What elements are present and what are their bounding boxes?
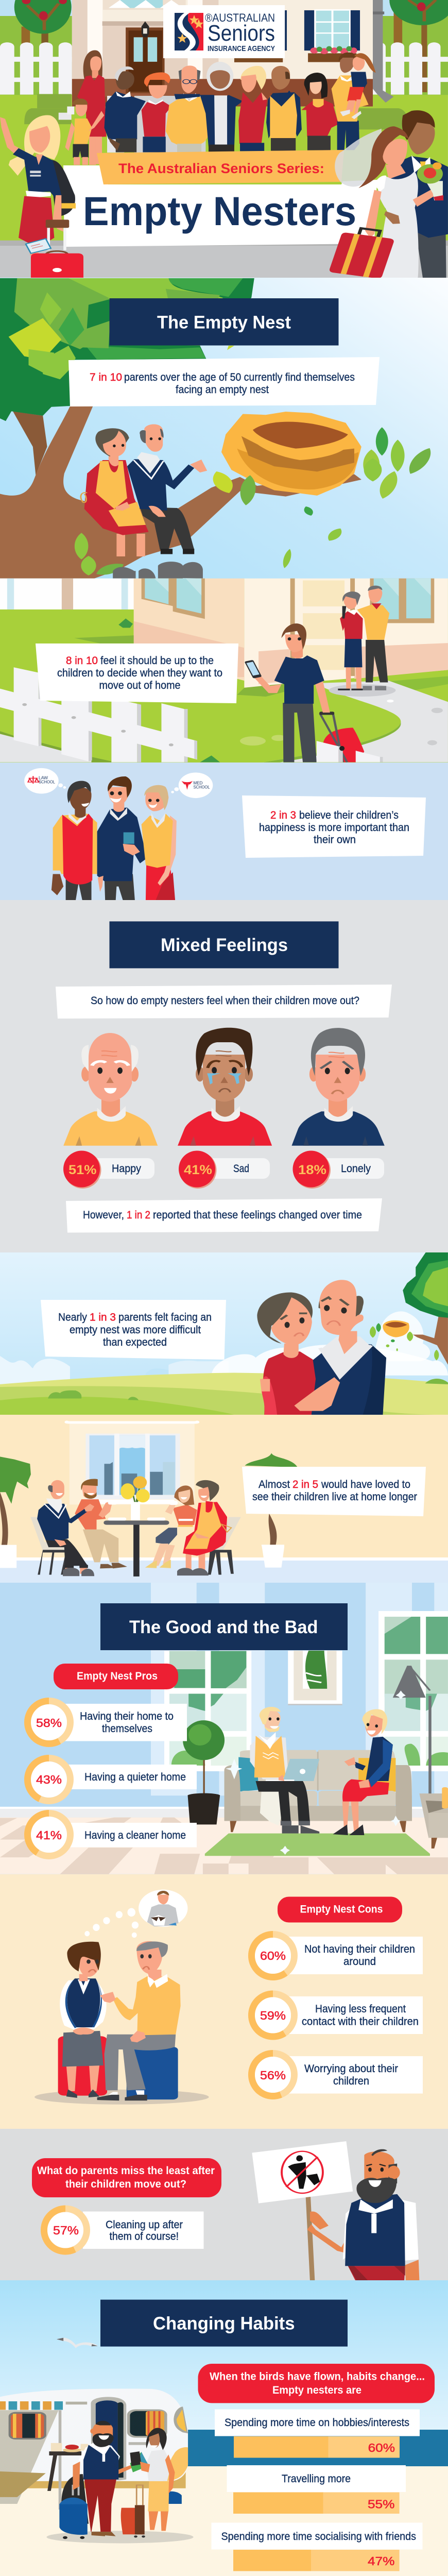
logo wordmark: Seniors xyxy=(208,21,275,46)
man holding sign xyxy=(252,2141,419,2281)
sea xyxy=(0,2430,448,2466)
woman with grey curly hair xyxy=(174,62,243,152)
con: 59%: Having less frequent xyxy=(315,2003,406,2015)
habit bar: friends 47% xyxy=(211,2522,422,2571)
question pill: What do parents miss the least after xyxy=(37,2165,215,2177)
law school label: LAW xyxy=(39,775,48,780)
distant tree with nest xyxy=(370,1252,448,1365)
man xyxy=(127,424,207,579)
bald man with glasses xyxy=(166,65,212,152)
father in red vest xyxy=(51,781,97,900)
section heading xyxy=(109,921,339,968)
con: 56%: children xyxy=(333,2075,369,2087)
med school label: MED xyxy=(194,780,203,785)
caravan xyxy=(0,2388,188,2524)
landscape with clouds and hills xyxy=(0,1311,448,1415)
section: miss the least xyxy=(0,2129,448,2281)
thought bubble: law school xyxy=(24,768,66,793)
con: 56% xyxy=(251,2054,423,2096)
lounge scene xyxy=(183,1666,448,1856)
panel: 1 in 2 statistic: reported that these feelings changed over time xyxy=(153,1209,362,1221)
panel: 1 in 3 statistic: 1 in 3 xyxy=(90,1312,116,1324)
woman in navy xyxy=(333,1709,393,1835)
blonde woman xyxy=(238,66,267,151)
panel: 2 in 5 statistic: 2 in 5 xyxy=(292,1479,318,1490)
section: difficult to adjust xyxy=(0,1252,448,1415)
pro: 41% cleaner home: 41% xyxy=(36,1828,62,1842)
pro: 41% cleaner home xyxy=(28,1814,197,1856)
panel: 2 in 3 statistic: their own xyxy=(314,834,356,846)
panel: 2 in 3 statistic: happiness is more important than xyxy=(259,822,409,834)
traveller with suitcase xyxy=(0,115,83,278)
section: children's happiness xyxy=(0,762,448,900)
garden and house xyxy=(0,579,448,762)
three parents xyxy=(51,776,177,900)
stat: 57% cleaning up: them of course! xyxy=(109,2231,179,2242)
mother in yellow xyxy=(142,785,177,900)
woman xyxy=(81,428,156,579)
cons pill xyxy=(278,1897,402,1923)
stat: 41% sad: Sad xyxy=(233,1163,249,1175)
habit bar: hobbies 60% xyxy=(215,2409,420,2458)
woman xyxy=(60,1942,107,2098)
habit bar: travelling 55%: 55% xyxy=(368,2498,394,2511)
habit bar: friends 47%: Spending more time socialising with friends xyxy=(221,2531,416,2543)
daughter xyxy=(145,1485,197,1568)
series ribbon: The Australian Seniors Series: xyxy=(118,161,324,176)
stat: 57% cleaning up xyxy=(44,2209,204,2251)
seagull xyxy=(57,2338,98,2348)
woman in red dress xyxy=(77,50,106,165)
logo mark xyxy=(175,13,204,50)
panel: 1 in 2 statistic xyxy=(66,1198,382,1232)
cons pill: Empty Nest Cons xyxy=(300,1903,383,1916)
con: 59% xyxy=(251,1994,423,2037)
pros pill: Empty Nest Pros xyxy=(77,1670,158,1682)
panel: 1 in 3 statistic: Nearly xyxy=(58,1312,87,1324)
panel: 7 in 10 statistic: 7 in 10 xyxy=(90,371,122,383)
section: moving out xyxy=(0,579,448,762)
section heading: Changing Habits xyxy=(153,2313,295,2334)
stat: 51% happy: 51% xyxy=(68,1163,97,1177)
pro: 58% home to themselves: Having their home to xyxy=(80,1710,174,1722)
pros pill xyxy=(54,1664,178,1689)
stat: 18% lonely: Lonely xyxy=(341,1163,371,1175)
series ribbon xyxy=(97,150,344,184)
pro: 43% quieter home xyxy=(28,1758,197,1801)
panel: 8 in 10 statistic: move out of home xyxy=(99,680,180,691)
panel: 2 in 5 statistic: Almost xyxy=(259,1479,290,1490)
intro pill: When the birds have flown, habits change... xyxy=(210,2371,425,2383)
sitting couple xyxy=(81,424,207,579)
bearded man xyxy=(307,2149,419,2281)
pro: 58% home to themselves: themselves xyxy=(102,1723,152,1735)
habit bar: travelling 55%: Travelling more xyxy=(282,2473,351,2485)
panel: 2 in 3 statistic: 2 in 3 xyxy=(270,809,296,821)
stat: 51% happy: Happy xyxy=(112,1163,141,1175)
luggage xyxy=(59,2485,182,2539)
bride and groom xyxy=(329,110,448,279)
section: cons xyxy=(0,1874,448,2129)
section heading: The Empty Nest xyxy=(157,312,291,333)
logo wordmark: ®AUSTRALIAN xyxy=(205,11,275,24)
habit bar: hobbies 60%: Spending more time on hobbies/interests xyxy=(225,2417,409,2429)
habit bar: travelling 55% xyxy=(227,2465,406,2514)
empty nest pros xyxy=(28,1664,197,1856)
right plant xyxy=(245,1453,298,1568)
nest xyxy=(75,412,437,578)
panel: 1 in 2 statistic: 1 in 2 xyxy=(127,1209,150,1221)
man with laptop xyxy=(250,1707,319,1834)
con: 56%: Worrying about their xyxy=(304,2063,398,2075)
parents at the door xyxy=(329,586,395,697)
panel: 8 in 10 statistic: children to decide when they want to xyxy=(57,667,222,679)
white fence xyxy=(0,667,197,762)
man xyxy=(97,1941,181,2100)
father in navy jumper xyxy=(97,776,147,900)
med school label: SCHOOL xyxy=(194,784,210,789)
worried couple xyxy=(257,1280,386,1415)
logo wordmark: INSURANCE AGENCY xyxy=(208,44,275,53)
pro: 58% home to themselves: 58% xyxy=(36,1716,62,1730)
pro: 43% quieter home: 43% xyxy=(36,1773,62,1786)
panel: 7 in 10 statistic: parents over the age of 50 currently find themselves xyxy=(124,371,355,383)
woman with black hair xyxy=(301,73,343,150)
con: 56%: 56% xyxy=(260,2069,286,2082)
thought bubble with son and dog xyxy=(84,1890,188,1938)
sparkles xyxy=(226,1690,406,1855)
family group xyxy=(65,50,376,165)
logo box xyxy=(163,5,285,58)
stat: 57% cleaning up: 57% xyxy=(53,2224,79,2237)
med school label xyxy=(194,780,210,789)
happy man xyxy=(63,1033,158,1146)
section heading: Mixed Feelings xyxy=(161,935,288,955)
woman xyxy=(257,1293,316,1415)
sign post xyxy=(306,2197,315,2281)
section: at the table xyxy=(0,1415,448,1583)
woman xyxy=(130,2428,175,2531)
panel: 1 in 3 statistic xyxy=(41,1300,226,1360)
panel: 2 in 3 statistic: believe their children’s xyxy=(299,809,399,821)
section: the empty nest xyxy=(0,278,448,579)
question panel xyxy=(56,985,392,1019)
mother xyxy=(177,1480,231,1575)
boy with cap xyxy=(65,98,105,165)
law school label: SCHOOL xyxy=(39,779,55,784)
crying man xyxy=(178,1028,272,1146)
left plant xyxy=(0,1456,31,1568)
window with curtains xyxy=(64,1421,199,1504)
section heading xyxy=(100,2300,348,2347)
section: hero xyxy=(0,0,448,279)
panel: 8 in 10 statistic xyxy=(36,643,238,703)
man xyxy=(312,1280,386,1415)
white title panel xyxy=(63,165,377,247)
section: mixed feelings xyxy=(0,900,448,1252)
section: changing habits xyxy=(0,2280,448,2576)
panel: 8 in 10 statistic: 8 in 10 xyxy=(66,655,98,667)
pro: 41% cleaner home: Having a cleaner home xyxy=(84,1829,186,1841)
man in navy jumper xyxy=(105,66,146,152)
living room background xyxy=(0,1583,448,1874)
armchair xyxy=(419,1787,448,1849)
red ottoman and blue ottoman xyxy=(58,2036,178,2099)
travelling couple xyxy=(46,2421,194,2543)
habit bar: hobbies 60%: 60% xyxy=(368,2441,395,2454)
rug xyxy=(205,1834,430,1856)
con: 60%: around xyxy=(343,1956,376,1968)
panel: 2 in 5 statistic: would have loved to xyxy=(321,1479,410,1490)
panel: 2 in 3 statistic xyxy=(242,795,426,858)
question pill: their children move out? xyxy=(65,2178,186,2190)
worried seated couple xyxy=(35,1941,209,2105)
logo wordmark xyxy=(205,11,275,53)
intro pill: Empty nesters are xyxy=(272,2384,361,2396)
empty nest cons xyxy=(251,1897,423,2096)
con: 59%: contact with their children xyxy=(302,2015,419,2028)
son with suitcase and phone xyxy=(245,623,383,762)
pro: 58% home to themselves xyxy=(28,1701,187,1743)
topiary plant xyxy=(183,1720,225,1824)
stat: 41% sad xyxy=(179,1151,270,1189)
tree xyxy=(0,278,361,579)
panel: 7 in 10 statistic: facing an empty nest xyxy=(176,384,269,396)
pro: 43% quieter home: Having a quieter home xyxy=(84,1771,186,1783)
habit bar: friends 47%: 47% xyxy=(368,2554,394,2568)
title banner with white panel xyxy=(63,150,377,247)
lonely man xyxy=(291,1028,385,1146)
panel: 2 in 5 statistic xyxy=(242,1467,426,1516)
question pill xyxy=(32,2158,221,2197)
man carrying child xyxy=(332,52,376,150)
con: 60%: 60% xyxy=(260,1949,286,1962)
panel: 1 in 3 statistic: parents felt facing an xyxy=(118,1312,212,1324)
stat: 51% happy xyxy=(63,1151,154,1189)
con: 60% xyxy=(251,1934,423,1977)
father xyxy=(37,1480,94,1576)
stat: 41% sad: 41% xyxy=(184,1163,212,1177)
section heading: The Good and the Bad xyxy=(129,1617,318,1637)
section heading xyxy=(100,1603,348,1650)
panel: 1 in 3 statistic: empty nest was more difficult xyxy=(70,1324,201,1336)
stat: 18% lonely xyxy=(292,1151,384,1189)
panel: 2 in 5 statistic: see their children live at home longer xyxy=(252,1491,417,1503)
hero background: house, fence and trees xyxy=(0,0,448,278)
panel: 1 in 3 statistic: than expected xyxy=(103,1336,167,1348)
panel: 8 in 10 statistic: feel it should be up to the xyxy=(100,655,214,667)
sofa xyxy=(225,1750,412,1832)
floor lamp xyxy=(393,1666,432,1795)
stat: 18% lonely: 18% xyxy=(298,1163,326,1177)
woman with orange hair xyxy=(142,72,171,152)
man xyxy=(73,2421,134,2536)
protest sign xyxy=(252,2141,353,2204)
con: 60%: Not having their children xyxy=(304,1943,415,1955)
son xyxy=(75,1479,127,1568)
family at the table xyxy=(30,1476,241,1577)
con: 59%: 59% xyxy=(260,2009,286,2022)
bald man in yellow vest xyxy=(266,66,302,151)
panel: 1 in 2 statistic: However, xyxy=(83,1209,124,1221)
section heading xyxy=(109,298,339,345)
intro pill xyxy=(198,2364,435,2403)
law school label xyxy=(39,775,55,784)
main title: Empty Nesters xyxy=(83,188,356,234)
question panel: So how do empty nesters feel when their children move out? xyxy=(91,995,359,1007)
section: the good and the bad xyxy=(0,1583,448,1874)
stat: 57% cleaning up: Cleaning up after xyxy=(106,2219,183,2231)
panel: 7 in 10 statistic xyxy=(68,357,380,406)
thought bubble: med school xyxy=(171,772,213,798)
